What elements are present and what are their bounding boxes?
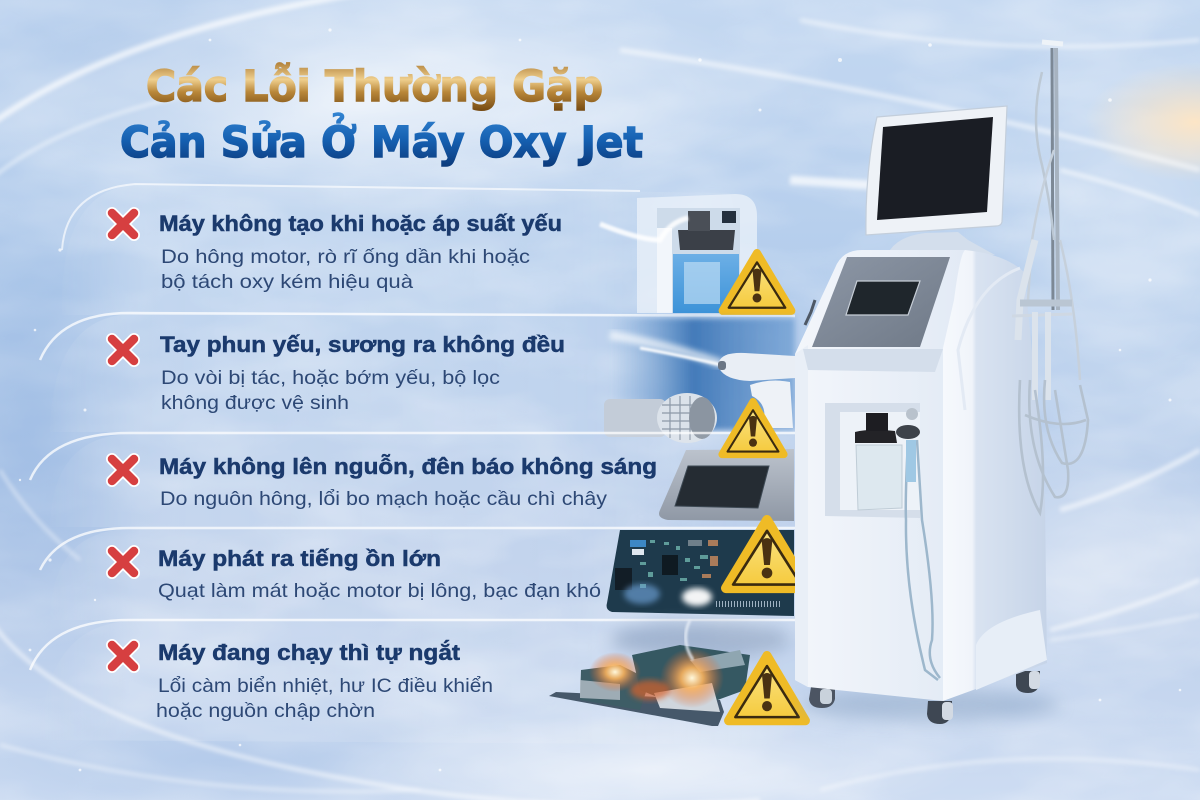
- monitor stand: [890, 232, 995, 255]
- handpiece hoses on front: [906, 440, 940, 680]
- panel 5: auto shutdown: [40, 620, 805, 745]
- panel 1 description: bộ tách oxy kém hiệu quà: [161, 271, 413, 293]
- hose loops: [1019, 380, 1088, 513]
- panel 1 divider: [40, 313, 795, 360]
- machine shadow: [800, 689, 1060, 721]
- panel 4 band: [50, 529, 795, 620]
- panel 2 image: spray handpiece and filter: [604, 318, 795, 443]
- panel 4: loud noise: [30, 520, 808, 670]
- panel 2: weak spray: [30, 314, 795, 480]
- front lower edge: [795, 345, 808, 687]
- icon: red cross: [112, 459, 134, 481]
- panel 3: no power: [40, 434, 795, 570]
- side curve highlight: [976, 610, 1047, 690]
- icon: warning triangle: [723, 253, 791, 311]
- monitor: [866, 106, 1007, 235]
- panel 4 heading: Máy phát ra tiếng ồn lớn: [158, 546, 441, 571]
- bottle recess: [825, 403, 920, 518]
- panel 1: air pressure fault: [40, 184, 795, 360]
- icon: red cross: [112, 645, 134, 667]
- panel 3 divider: [40, 528, 795, 570]
- panel 2 band: [50, 314, 795, 432]
- panel 1 heading: Máy không tạo khi hoặc áp suất yếu: [159, 211, 562, 236]
- small remote on panel edge: [805, 300, 815, 325]
- panel 1 image: oxygen bottle: [600, 194, 757, 313]
- panel 4 divider: [30, 620, 795, 670]
- control screen: [846, 281, 920, 315]
- machine front column: [795, 250, 965, 701]
- panel 3 image: control panel: [659, 449, 794, 521]
- panel 2 description: không được vệ sinh: [161, 392, 349, 414]
- panel 2 heading: Tay phun yếu, sương ra không đều: [160, 332, 565, 357]
- panel 5 image: burning circuit board: [549, 620, 790, 726]
- machine side body: [943, 250, 1047, 701]
- icon: warning triangle: [729, 656, 805, 721]
- wheels: [809, 671, 1040, 724]
- panel 5 heading: Máy đang chạy thì tự ngắt: [158, 640, 461, 665]
- icon: red cross: [112, 213, 134, 235]
- panel 1 band: [62, 184, 757, 315]
- panel 3 band: [50, 434, 795, 527]
- icon: warning triangle (panel 2): [722, 402, 784, 454]
- machine: Oxy Jet device: [795, 42, 1088, 724]
- panel 5 description: hoặc nguồn chập chờn: [156, 700, 375, 722]
- control panel: [812, 257, 950, 347]
- panel 5 band: [40, 621, 795, 745]
- panel 2 divider: [30, 433, 795, 480]
- panel 2 description: Do vòi bị tác, hoặc bớm yếu, bộ lọc: [161, 367, 500, 389]
- pole with tubes: [1012, 42, 1080, 400]
- shoulder seam: [958, 268, 1020, 410]
- panel 3 heading: Máy không lên nguỗn, đên báo không sáng: [159, 454, 657, 479]
- panel 3 description: Do nguôn hông, lổi bo mạch hoặc cầu chì chây: [160, 488, 607, 510]
- title line 1 (gold): Các Lỗi Thường Gặp: [146, 62, 603, 112]
- icon: warning triangle: [726, 520, 808, 588]
- panel 5 description: Lổi càm biển nhiệt, hư IC điều khiển: [158, 675, 493, 697]
- title: [120, 62, 643, 168]
- panel 4 image: circuit board: [607, 530, 794, 616]
- shelf shadow: [803, 349, 943, 372]
- title line 2 (blue): Cản Sửa Ở Máy Oxy Jet: [120, 113, 643, 168]
- icon: red cross: [112, 551, 134, 573]
- panel 1 description: Do hông motor, rò rĩ ống dần khi hoặc: [161, 246, 530, 268]
- panel 4 description: Quạt làm mát hoặc motor bị lông, bạc đạn khó: [158, 580, 601, 602]
- icon: red cross: [112, 339, 134, 361]
